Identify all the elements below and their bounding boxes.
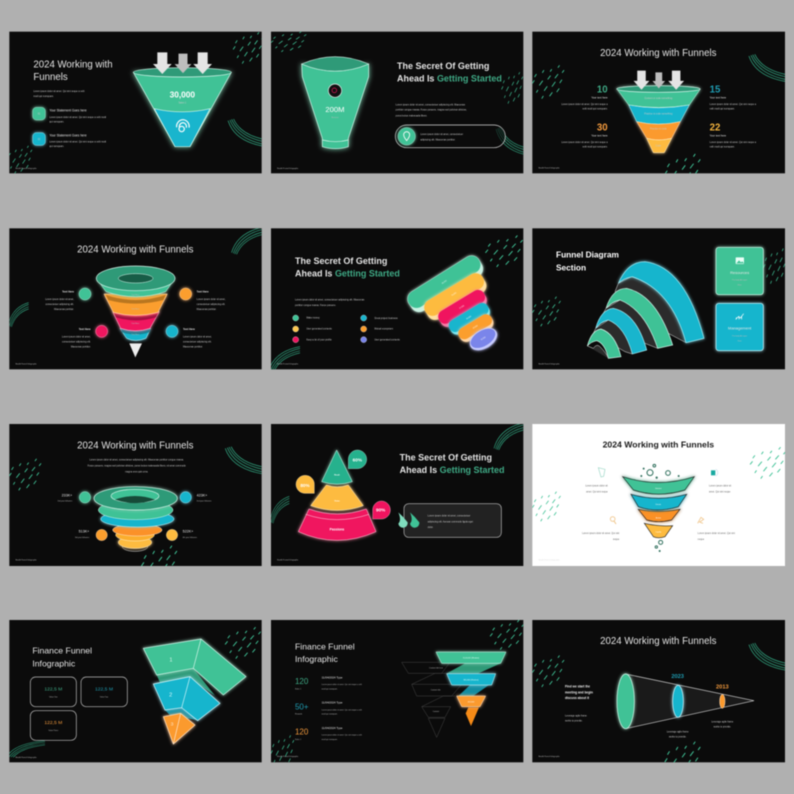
statement 02: Your Statement Goes here: [49, 133, 87, 137]
text bottom right: [698, 517, 735, 541]
stat 22: 22: [710, 122, 720, 133]
stat 22: velit modi qui numquam.: [710, 146, 735, 149]
callout top right: Lorem ipsum dolor sit amet,: [197, 299, 225, 301]
statement 01: Lorem ipsum dolor sit amet. Qui sint neque a velit modi: [49, 117, 106, 119]
title: Section: [556, 263, 586, 273]
outline steps: [402, 662, 462, 737]
title: 2024 Working with Funnels: [600, 636, 717, 647]
bubble 80%: 80%: [300, 483, 311, 488]
legend: [293, 315, 401, 343]
stat 513K: 513K+: [79, 530, 89, 534]
stat 522K: 522K+: [183, 530, 193, 534]
title: Getting Started: [440, 465, 505, 475]
tilted funnel stack: 15,000: [480, 337, 486, 341]
footer: Stealth Funnel Infographic: [277, 363, 298, 366]
layered funnel: Text Here: [131, 333, 139, 336]
outline steps: Content title here: [429, 666, 443, 669]
funnel bowls: Action: [656, 517, 661, 520]
stat 423K: 423K+: [197, 494, 207, 498]
stat 15: Lorem ipsum dolor sit amet. Qui sint neque a: [710, 104, 756, 106]
value one: Value One: [49, 696, 58, 698]
intro text: modi qui numquam.: [33, 96, 54, 98]
layered funnel: [96, 266, 175, 357]
colored funnel steps: 11,00,000 (Wisdom): [463, 658, 480, 660]
stat 10: Lorem ipsum dolor sit amet. Qui sint neque a: [561, 104, 608, 106]
footer: Stealth Funnel Infographic: [15, 756, 37, 759]
stat 30: [561, 122, 608, 149]
footer: Stealth Funnel Infographic: [538, 167, 560, 170]
input arrows: [153, 52, 212, 74]
3D funnel: [143, 639, 246, 744]
stat 10: [561, 84, 608, 111]
callout pill: [395, 125, 505, 148]
funnel stage labels: Content or code something: [644, 97, 673, 100]
stat 233K: 2nd year followers: [57, 501, 72, 503]
title: Infographic: [32, 659, 76, 669]
panel: slide 5 rotated funnel: [269, 228, 523, 371]
callout top left: Maecenas porttitor.: [54, 308, 74, 311]
layered funnel: Text Here: [131, 307, 139, 310]
stat 50+ rewards: Rewards: [295, 714, 302, 716]
funnel stage labels: Practice to code: [650, 127, 667, 130]
footer: Stealth Funnel Infographic: [277, 559, 298, 562]
lead text: meeting and begin: [565, 690, 593, 694]
stat 120 sales: Lorem ipsum dolor sit amet. Qui sint neque a velit: [322, 684, 362, 686]
paragraph: Lorem ipsum dolor sit amet, consectetuer adipiscing elit. Maecenas: [295, 300, 364, 302]
callout bottom left: consectetuer adipiscing elit.: [62, 341, 91, 344]
note 1: works to provide.: [565, 720, 583, 723]
title: 2024 Working with: [33, 59, 113, 70]
title: The Secret Of Getting: [295, 256, 387, 266]
tilted funnel stack: [404, 252, 501, 355]
lead text: Find we start the: [565, 685, 590, 689]
callout bottom right: Maecenas porttitor.: [183, 346, 203, 349]
card: management: [716, 303, 763, 351]
statement 01: [33, 107, 107, 123]
stat 120 sales: Sales 1: [295, 688, 301, 690]
funnel bowls: Loyalty: [655, 531, 661, 534]
value one: 122,5 M: [44, 686, 62, 692]
colored funnel steps: 412,000: [468, 701, 474, 703]
paragraph: purus lectus malesuada libero.: [396, 114, 428, 117]
text top left: amet. Qui sint neque: [586, 491, 608, 494]
callout pill: adipiscing elit. Maecenas porttitor.: [420, 138, 456, 141]
title: The Secret Of Getting: [400, 452, 492, 462]
bubble 80%: [296, 475, 314, 493]
panel: slide 8 pyramid: [270, 423, 523, 566]
stat 10: velit modi qui numquam.: [582, 108, 608, 111]
text bottom right: neque: [698, 539, 705, 541]
layered funnel: Text Here: [131, 322, 139, 325]
callout bottom left: [62, 325, 108, 349]
legend: Keep a lot of your profits: [306, 338, 332, 341]
panel: slide 4 layered funnel: [8, 227, 263, 369]
panel: slide 6 funnel diagram section: [532, 228, 786, 369]
note 3: Leverage agile frame: [711, 721, 733, 723]
stat 30: 30: [597, 122, 608, 133]
title: Infographic: [295, 654, 339, 664]
callout top left: Lorem ipsum dolor sit amet,: [45, 299, 74, 301]
title: 2024 Working with Funnels: [603, 440, 714, 450]
stat 120 sales: modi qui numquam.: [322, 688, 338, 690]
footer: Stealth Funnel Infographic: [15, 167, 37, 170]
panel: slide 1 funnel with statements: [7, 32, 263, 173]
paragraph: magna eros quis urna.: [125, 470, 149, 473]
stat 513K: [75, 529, 107, 541]
3D funnel: 3: [171, 722, 174, 728]
value three: Value Three: [48, 730, 58, 732]
tilted funnel stack: 26,000: [466, 316, 472, 320]
pyramid: Result: [334, 474, 340, 477]
stat 50+ rewards: modi qui numquam.: [322, 714, 338, 716]
stat 50+ rewards: 50+: [295, 702, 309, 711]
stat 22: [710, 122, 757, 149]
bubbles: [641, 464, 679, 551]
funnel stage labels: Code: [656, 145, 662, 147]
stat 513K: 3rd year followers: [75, 537, 89, 539]
legend: User generated contents: [306, 328, 333, 331]
funnel bowls: [623, 477, 694, 538]
card: management: Management: [728, 326, 752, 331]
quote box: adipiscing elit. Aenean commodo ligula eget: [428, 520, 473, 523]
panel: slide 9 white funnel: [532, 424, 785, 566]
note 2: works to provide.: [669, 736, 687, 739]
statement 02: [33, 133, 107, 148]
outline steps: Content: [433, 710, 440, 713]
funnel bowls: Interest: [655, 487, 662, 490]
panel: slide 2 secret of getting ahead: [271, 32, 524, 173]
stat 15: [710, 84, 757, 111]
card: management: Here: [738, 340, 742, 342]
stat 30: Your text here: [591, 133, 608, 137]
3D funnel: 1: [169, 657, 173, 663]
value one: [30, 677, 76, 707]
3D funnel: 2: [169, 692, 172, 698]
value two: [81, 677, 127, 707]
title: Getting Started: [437, 74, 502, 84]
legend: Great project business: [374, 317, 398, 320]
text bottom left: [582, 517, 620, 541]
callout bottom right: Text Here: [183, 327, 195, 331]
card: resources: [716, 247, 763, 295]
title: Getting Started: [335, 269, 400, 279]
bubble 60%: [348, 450, 367, 469]
tilted funnel stack: 25,000: [473, 325, 478, 330]
arch diagram: [587, 262, 704, 358]
legend: User generated contents: [374, 338, 401, 341]
stat 120 sales 2: Sales 1: [295, 739, 301, 741]
value two: Value Two: [100, 696, 108, 698]
title: Ahead Is: [397, 74, 437, 84]
callout top right: Maecenas porttitor.: [197, 308, 217, 311]
legend: Mutual ecosystem: [374, 328, 393, 331]
bubble 90%: 90%: [376, 508, 386, 513]
funnel: Sales 1: [178, 102, 187, 104]
paragraph: porttitor congue massa. Fusce posuere, magna sed pulvinar ultricies,: [396, 109, 467, 112]
card: resources: Here: [738, 285, 742, 287]
callout top right: consectetuer adipiscing elit.: [197, 303, 226, 306]
stat 50+ rewards: 11/04/2024 Type: [322, 701, 343, 705]
callout bottom left: Text Here: [79, 327, 91, 331]
stat 50+ rewards: [295, 701, 362, 716]
paragraph: Lorem ipsum dolor sit amet, consectetuer adipiscing elit. Maecenas porttitor congue massa.: [89, 460, 184, 462]
title: Funnel Diagram: [556, 250, 619, 260]
bubble 90%: [373, 501, 390, 519]
pyramid: Passions: [330, 527, 344, 531]
funnel stage labels: [644, 97, 673, 147]
tilted funnel stack: 15,000: [451, 292, 457, 297]
value three: 122,5 M: [44, 720, 62, 726]
stat 15: 15: [710, 84, 721, 95]
footer: Stealth Funnel Infographic: [15, 363, 37, 366]
tilted funnel stack: 27,000: [459, 305, 465, 310]
statement 02: qui numquam.: [49, 146, 64, 148]
paragraph: Fusce posuere, magna sed pulvinar ultricies, purus lectus malesuada libero, sit amet commodo: [88, 465, 186, 468]
funnel: [133, 68, 231, 147]
card: resources: Pro body Ad super: [732, 280, 747, 282]
statement 01: Your Statement Goes here: [49, 109, 87, 113]
stat 120 sales 2: 120: [295, 728, 309, 737]
stat 423K: 2nd year followers: [197, 501, 212, 503]
vase funnel: Revenue: [331, 117, 339, 119]
stat 120 sales 2: modi qui numquam.: [322, 739, 338, 741]
outline steps: Content title: [431, 688, 441, 691]
stat 120 sales: [295, 675, 362, 690]
colored funnel steps: [436, 652, 506, 726]
cone: [617, 674, 754, 729]
panel: slide 3 four stage funnel: [532, 32, 785, 191]
colored funnel steps: 961,000 (Wisdom): [464, 679, 479, 681]
vase funnel: [302, 57, 369, 149]
funnel stage labels: Practice to code something: [644, 113, 673, 116]
text top right: amet. Qui sint neque: [709, 491, 731, 494]
title: The Secret Of Getting: [397, 61, 489, 71]
callout top right: Text Here: [197, 290, 209, 294]
quote box: dolor.: [428, 526, 434, 529]
footer: Stealth Funnel Infographic: [15, 559, 37, 562]
text top left: Lorem ipsum dolor sit: [585, 485, 608, 487]
panel: slide 11 finance funnel steps: [271, 620, 524, 768]
callout bottom right: consectetuer adipiscing elit.: [183, 341, 212, 344]
stat 10: Your text here: [591, 95, 608, 99]
callout top left: [45, 288, 91, 311]
stat 22: Lorem ipsum dolor sit amet. Qui sint neque a: [710, 142, 756, 144]
callout bottom right: [166, 325, 212, 349]
stat 423K: [180, 492, 212, 503]
funnel: 30,000: [170, 89, 195, 99]
note 2: Leverage agile frame: [667, 731, 689, 733]
footer: Stealth Funnel Infographic: [277, 755, 298, 758]
text bottom right: Lorem ipsum dolor sit amet. Qui sint: [698, 533, 735, 535]
stat 15: velit modi qui numquam.: [710, 108, 735, 111]
card: resources: Resources: [730, 270, 749, 275]
stat 15: Your text here: [710, 95, 727, 99]
stat 120 sales 2: Lorem ipsum dolor sit amet. Qui sint neque a velit: [322, 735, 362, 737]
funnel bowls: Desire: [656, 504, 661, 506]
note 3: works to provide.: [714, 726, 731, 729]
title: Ahead Is: [295, 269, 335, 279]
title: Finance Funnel: [32, 645, 92, 655]
callout bottom right: Lorem ipsum dolor sit amet,: [183, 337, 212, 339]
bubble 60%: 60%: [353, 458, 363, 463]
text top right: [709, 469, 732, 494]
stat 120 sales 2: [295, 726, 362, 741]
paragraph: porttitor congue massa. Fusce posuere.: [295, 304, 336, 307]
callout bottom left: Lorem ipsum dolor sit amet,: [62, 337, 91, 339]
legend: Make money: [306, 318, 320, 320]
stat 120 sales 2: 11/04/2024 Type: [322, 726, 343, 730]
text top left: [585, 468, 608, 494]
callout bottom left: Maecenas porttitor.: [71, 346, 91, 349]
intro text: Lorem ipsum dolor sit amet. Qui sint neque a velit: [33, 91, 84, 93]
statement 01: qui numquam.: [49, 121, 64, 123]
callout top right: [180, 288, 226, 311]
callout pill: Lorem ipsum dolor sit amet, consectetuer: [420, 134, 463, 136]
title: 2024 Working with Funnels: [600, 48, 717, 59]
quote box: [398, 504, 501, 537]
title: 2024 Working with Funnels: [77, 440, 194, 451]
text bottom left: neque: [613, 539, 620, 541]
pyramid: Vision: [334, 500, 340, 502]
footer: Stealth Funnel Infographic: [538, 559, 560, 562]
year 2023: 2023: [671, 674, 684, 680]
footer: Stealth Funnel Infographic: [538, 363, 560, 366]
arrows: [634, 71, 684, 90]
stat 10: 10: [597, 84, 608, 95]
quote box: Lorem ipsum dolor sit amet, consectetuer: [428, 516, 470, 518]
statement 02: 02: [38, 139, 41, 141]
stat 120 sales: 11/04/2024 Type: [322, 675, 343, 679]
callout top left: consectetuer adipiscing elit.: [45, 303, 74, 306]
paragraph: Lorem ipsum dolor sit amet, consectetuer adipiscing elit. Maecenas: [396, 104, 465, 106]
stat 30: velit modi qui numquam.: [582, 146, 608, 149]
stat 30: Lorem ipsum dolor sit amet. Qui sint neque a: [561, 142, 608, 144]
stat 120 sales: 120: [295, 677, 309, 686]
statement 02: Lorem ipsum dolor sit amet. Qui sint neque a velit modi: [49, 142, 106, 144]
footer: Stealth Funnel Infographic: [538, 755, 560, 758]
panel: slide 7 ring funnel: [9, 424, 262, 582]
footer: Stealth Funnel Infographic: [277, 167, 298, 170]
stat 522K: 4th year followers: [183, 536, 197, 539]
stat 50+ rewards: Lorem ipsum dolor sit amet. Qui sint neque a velit: [322, 709, 362, 711]
value two: 122,5 M: [95, 686, 113, 692]
title: Funnels: [33, 72, 68, 83]
text top right: Lorem ipsum dolor sit: [709, 485, 731, 487]
panel: slide 10 finance funnel 3D: [7, 620, 262, 762]
text bottom left: Lorem ipsum dolor sit amet. Qui sint: [582, 533, 619, 535]
ring funnel: [94, 487, 177, 551]
callout top left: Text Here: [62, 290, 75, 294]
note 1: Leverage agile frame: [565, 716, 587, 718]
funnel: [617, 86, 700, 153]
tilted funnel stack: 25,000: [442, 280, 447, 285]
statement 01: 01: [38, 114, 41, 116]
pyramid: [298, 450, 376, 540]
vase funnel: 200M: [325, 105, 345, 114]
stat 22: Your text here: [710, 133, 727, 137]
lead text: discuss about it: [565, 696, 590, 700]
stat 522K: [166, 529, 197, 541]
value three: [30, 711, 76, 740]
year 2013: 2013: [716, 684, 729, 690]
layered funnel: Text Here: [131, 293, 139, 296]
stat 233K: [57, 492, 91, 503]
stat 233K: 233K+: [62, 494, 72, 498]
panel: slide 12 horizontal cone: [532, 620, 785, 778]
card: management: Pro body Ad super: [732, 336, 747, 338]
title: Ahead Is: [400, 465, 440, 475]
title: Finance Funnel: [295, 641, 355, 651]
title: 2024 Working with Funnels: [77, 244, 194, 255]
